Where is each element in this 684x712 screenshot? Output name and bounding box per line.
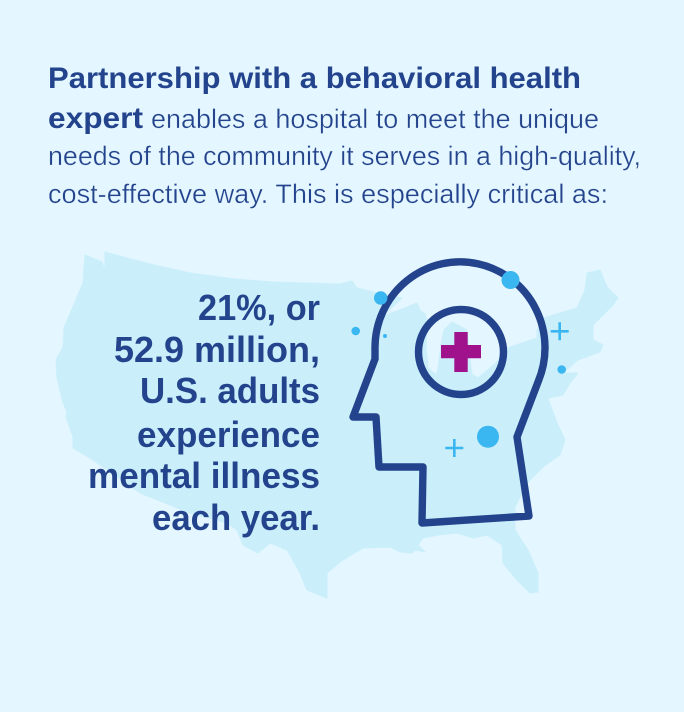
icon: medical cross in circle <box>418 310 504 394</box>
icon: head outline <box>353 262 545 523</box>
statistic text <box>88 287 320 538</box>
heading text block: needs of the community it serves in a high-quality, <box>48 141 641 171</box>
statistic text: each year. <box>152 497 320 538</box>
heading text block: cost-effective way. This is especially critical as: <box>48 179 608 209</box>
statistic text: 21%, or <box>198 287 320 328</box>
statistic text: experience <box>137 414 320 455</box>
statistic text: U.S. adults <box>140 370 320 411</box>
statistic text: 52.9 million, <box>114 329 320 370</box>
heading text block <box>48 62 641 209</box>
heading text block: Partnership with a behavioral health <box>48 62 581 95</box>
heading text block: expert <box>48 102 143 135</box>
statistic text: mental illness <box>88 455 320 496</box>
decorative dots <box>351 271 566 448</box>
heading text block: enables a hospital to meet the unique <box>151 104 599 134</box>
decorative plus signs <box>445 322 569 457</box>
map of the United States <box>56 252 618 598</box>
